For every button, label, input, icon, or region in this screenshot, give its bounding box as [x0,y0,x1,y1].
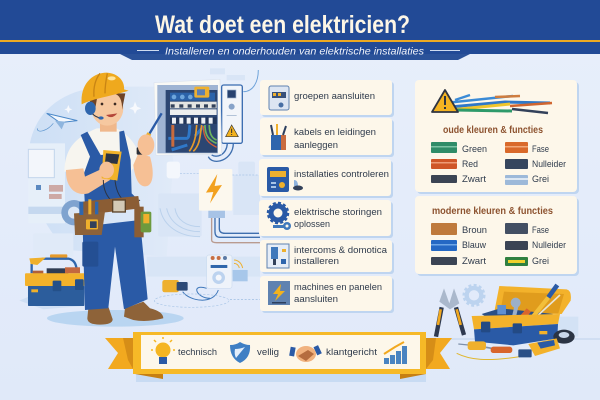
card: machines en panelen aansluiten: machines en panelen [294,282,382,292]
card: elektrische storingen oplossen: elektrische storingen [294,207,382,217]
icon: intercom [267,244,289,268]
card: intercoms en domotica installeren: intercoms & domotica [294,245,387,255]
icon: fuse box [269,86,289,110]
intercom device [154,255,260,307]
bottom ribbon [105,332,452,382]
heading: oude kleuren & functies [443,125,543,136]
bib and straps [81,131,138,207]
icon: gear and wrench [268,203,291,230]
task list [259,80,394,313]
lightning panel [199,169,232,218]
screwdriver [458,341,512,353]
title: Wat doet een elektricien? [155,11,410,39]
card: kabels en leidingen aanleggen [260,118,394,157]
card: kabels en leidingen aanleggen: kabels en leidingen [294,127,376,137]
card: groepen aansluiten: groepen aansluiten [294,91,375,101]
swatch legend [431,142,566,185]
electrician [47,73,184,327]
card: machines en panelen aansluiten [260,276,394,313]
swatch legend: Zwart [462,174,486,185]
swatch legend: Red [462,159,478,170]
paper plane [37,113,77,131]
subtitle: Installeren en onderhouden van elektrische installaties [165,46,425,58]
cable and tester [457,338,560,360]
shirt [64,128,142,193]
bottom ribbon: vellig [257,347,279,357]
card: intercoms en domotica installeren: installeren [294,256,339,266]
warning label [226,125,238,137]
multimeter [99,150,140,208]
icon: light bulb [151,337,175,364]
left arm [66,167,110,194]
icon: tester [267,167,303,192]
trousers [83,220,148,310]
toolbox right with tools [420,285,600,360]
swatch legend: Nulleider [532,159,566,170]
swatch legend: Grei [532,256,549,267]
icon: machine panel [268,281,290,305]
swatch legend: Green [462,144,487,155]
ribbon tails [105,338,452,379]
open toolbox [472,285,571,345]
faded gear [464,285,484,306]
boots [87,302,163,325]
right arm with screwdriver [133,113,162,186]
cabinet box [154,79,242,155]
icon: handshake [289,345,322,362]
panel: oude kleuren en functies [415,80,579,194]
swatch legend: Nulleider [532,240,566,251]
electrical panel [154,79,242,155]
face and neck [89,91,125,132]
tool belt [74,196,151,237]
swatch legend [431,223,566,267]
icon: shield [230,342,250,363]
swatch legend: Fase [532,225,549,236]
card: intercoms en domotica installeren [260,240,394,274]
card: machines en panelen aansluiten: aansluiten [294,294,338,304]
ground shadow [47,310,184,327]
card: groepen aansluiten [260,80,394,117]
heading: moderne kleuren & functies [432,206,553,217]
bottom ribbon: technisch [178,347,217,357]
bottom ribbon: klantgericht [326,347,378,357]
pliers [436,288,464,337]
card: installaties controleren: installaties controleren [294,169,389,179]
tape roll [553,330,575,344]
card: elektrische storingen oplossen: oplossen [294,219,330,229]
wires from lightning panel [160,70,260,243]
swatch legend: Zwart [462,256,486,267]
card: kabels en leidingen aanleggen: aanleggen [294,140,338,150]
card: elektrische storingen oplossen [259,200,393,238]
icon: growth chart [384,342,407,364]
helmet and headset [82,73,129,120]
cable tester [162,280,188,292]
toolbox left [19,254,85,309]
panel: moderne kleuren en functies [415,196,579,276]
icon: cable bundle [271,124,286,150]
ribbon shadow [136,372,426,382]
swatch legend: Fase [532,144,549,155]
icon: warning triangle [432,90,458,112]
swatch legend: Blauw [462,240,486,251]
illustration: colored wires [445,95,552,113]
header banner [0,0,600,60]
faded background illustration [28,68,260,277]
delivery van [28,143,87,225]
swatch legend: Grei [532,174,549,185]
swatch legend: Broun [462,225,487,236]
card: installaties controleren [259,159,393,198]
